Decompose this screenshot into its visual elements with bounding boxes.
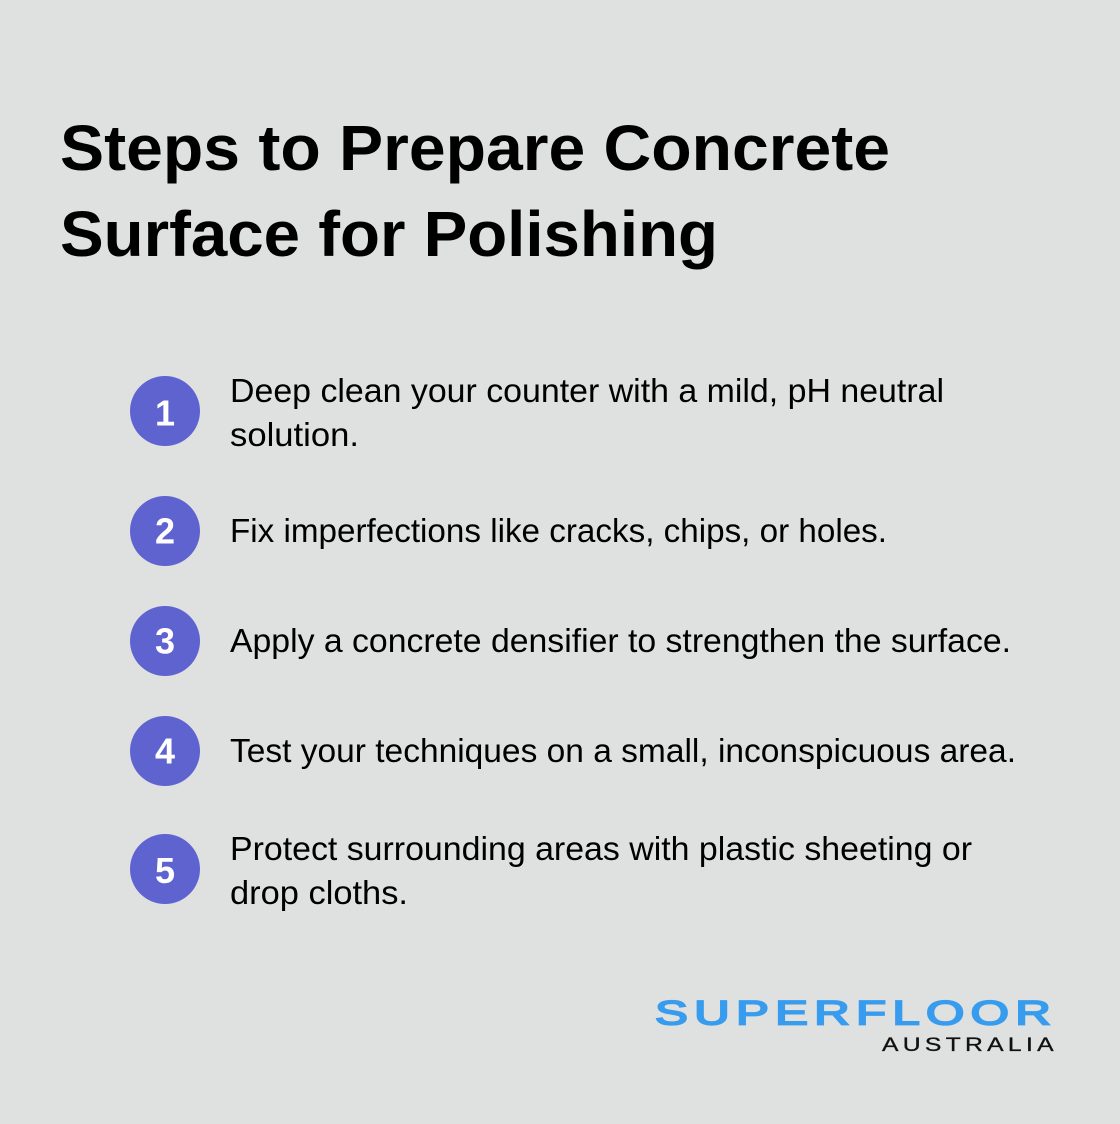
step 4 number badge [130, 716, 200, 786]
logo: Superfloor Australia: SUPERFLOOR [655, 994, 1051, 1032]
step 4 text: Test your techniques on a small, inconspicuous area. [230, 733, 1016, 770]
step 5 text: Protect surrounding areas with plastic sheeting or [230, 831, 972, 868]
logo: Superfloor Australia: AUSTRALIA [882, 1034, 1054, 1055]
step 1 number badge: 1 [155, 392, 175, 434]
step 5 text [230, 831, 972, 912]
step 2 number badge [130, 496, 200, 566]
step 2 [130, 496, 887, 566]
step 1 text [230, 373, 944, 454]
step 4 number badge: 4 [155, 730, 175, 772]
step 5 text: drop cloths. [230, 875, 408, 912]
step 3 text: Apply a concrete densifier to strengthen the surface. [230, 623, 1011, 660]
step 1 [130, 373, 944, 454]
title [60, 112, 890, 270]
step 5 number badge: 5 [155, 850, 175, 891]
step 1 text: solution. [230, 417, 359, 454]
step 5 [130, 831, 972, 912]
step 3 number badge: 3 [155, 620, 175, 662]
step 1 text: Deep clean your counter with a mild, pH neutral [230, 373, 944, 410]
step 4 [130, 716, 1016, 786]
step 2 number badge: 2 [155, 510, 175, 552]
logo: Superfloor Australia [655, 994, 1054, 1055]
step 3 number badge [130, 606, 200, 676]
step 1 number badge [130, 376, 200, 446]
title: Steps to Prepare Concrete [60, 112, 890, 184]
step 5 number badge [130, 834, 200, 904]
step 3 [130, 606, 1011, 676]
title: Surface for Polishing [60, 198, 718, 270]
step 2 text: Fix imperfections like cracks, chips, or holes. [230, 513, 887, 550]
